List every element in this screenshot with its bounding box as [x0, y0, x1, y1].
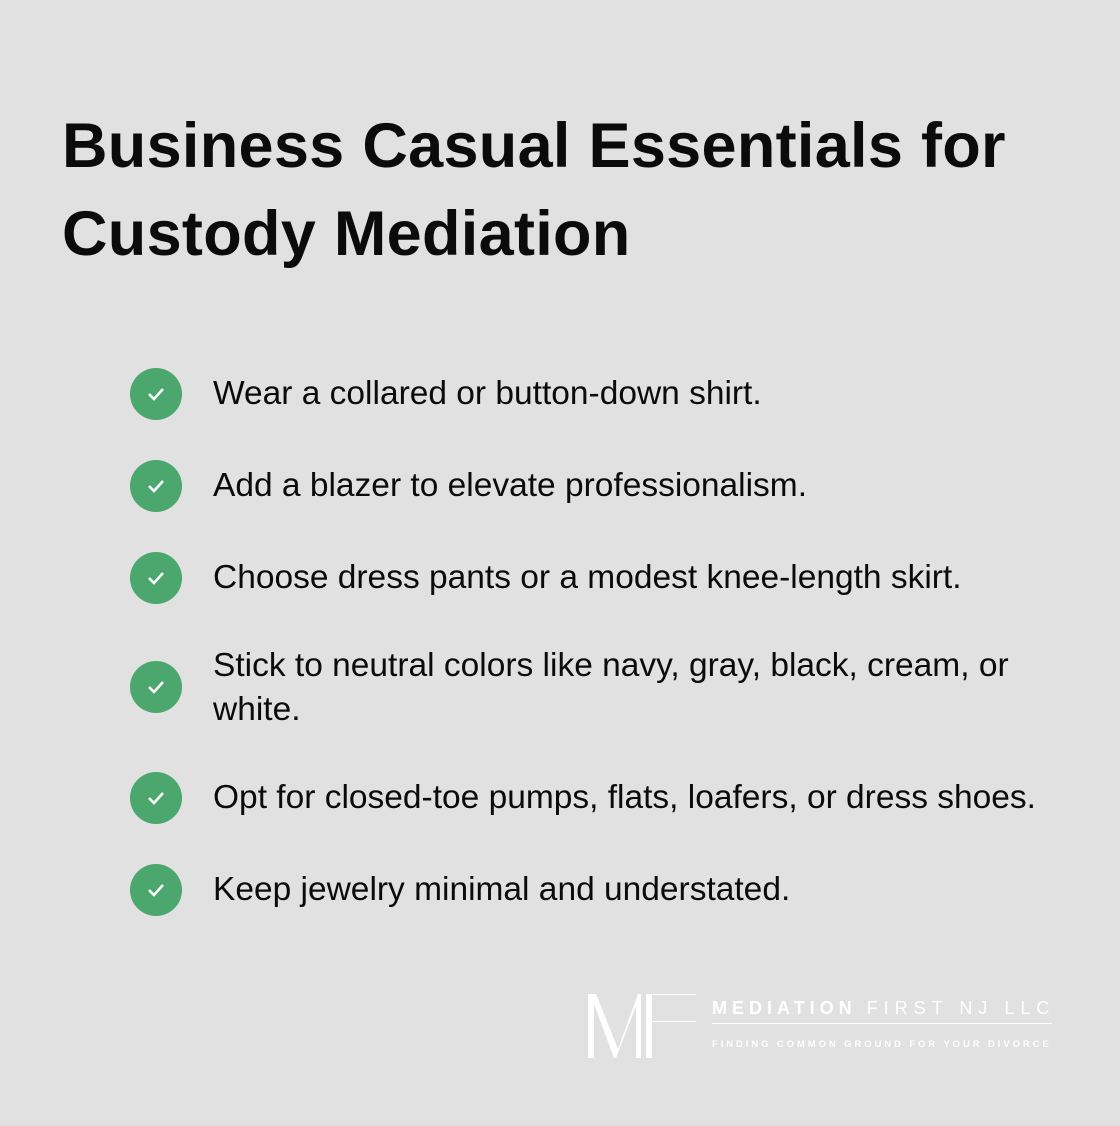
icon: check	[130, 368, 182, 420]
icon: check	[130, 661, 182, 713]
item 1	[130, 368, 762, 420]
item 3	[130, 552, 962, 604]
logo mark MF	[588, 994, 696, 1058]
logo text: MEDIATION FIRST NJ LLC	[712, 998, 1055, 1018]
item 1: Wear a collared or button-down shirt.	[213, 375, 762, 412]
logo	[588, 994, 1055, 1058]
logo: FINDING COMMON GROUND FOR YOUR DIVORCE	[712, 1039, 1052, 1050]
title	[62, 111, 1006, 269]
item 4: Stick to neutral colors like navy, gray, black, cream, or	[213, 647, 1009, 684]
item 2: Add a blazer to elevate professionalism.	[213, 467, 807, 504]
item 6	[130, 864, 790, 916]
title: Business Casual Essentials for	[62, 111, 1006, 181]
icon: check	[130, 864, 182, 916]
item 6: Keep jewelry minimal and understated.	[213, 871, 790, 908]
item 5	[130, 772, 1036, 824]
item 5: Opt for closed-toe pumps, flats, loafers, or dress shoes.	[213, 779, 1036, 816]
icon: check	[130, 460, 182, 512]
item 4	[130, 647, 1009, 728]
item 4: white.	[213, 691, 301, 728]
icon: check	[130, 772, 182, 824]
item 2	[130, 460, 807, 512]
icon: check	[130, 552, 182, 604]
item 3: Choose dress pants or a modest knee-length skirt.	[213, 559, 962, 596]
title: Custody Mediation	[62, 199, 631, 269]
